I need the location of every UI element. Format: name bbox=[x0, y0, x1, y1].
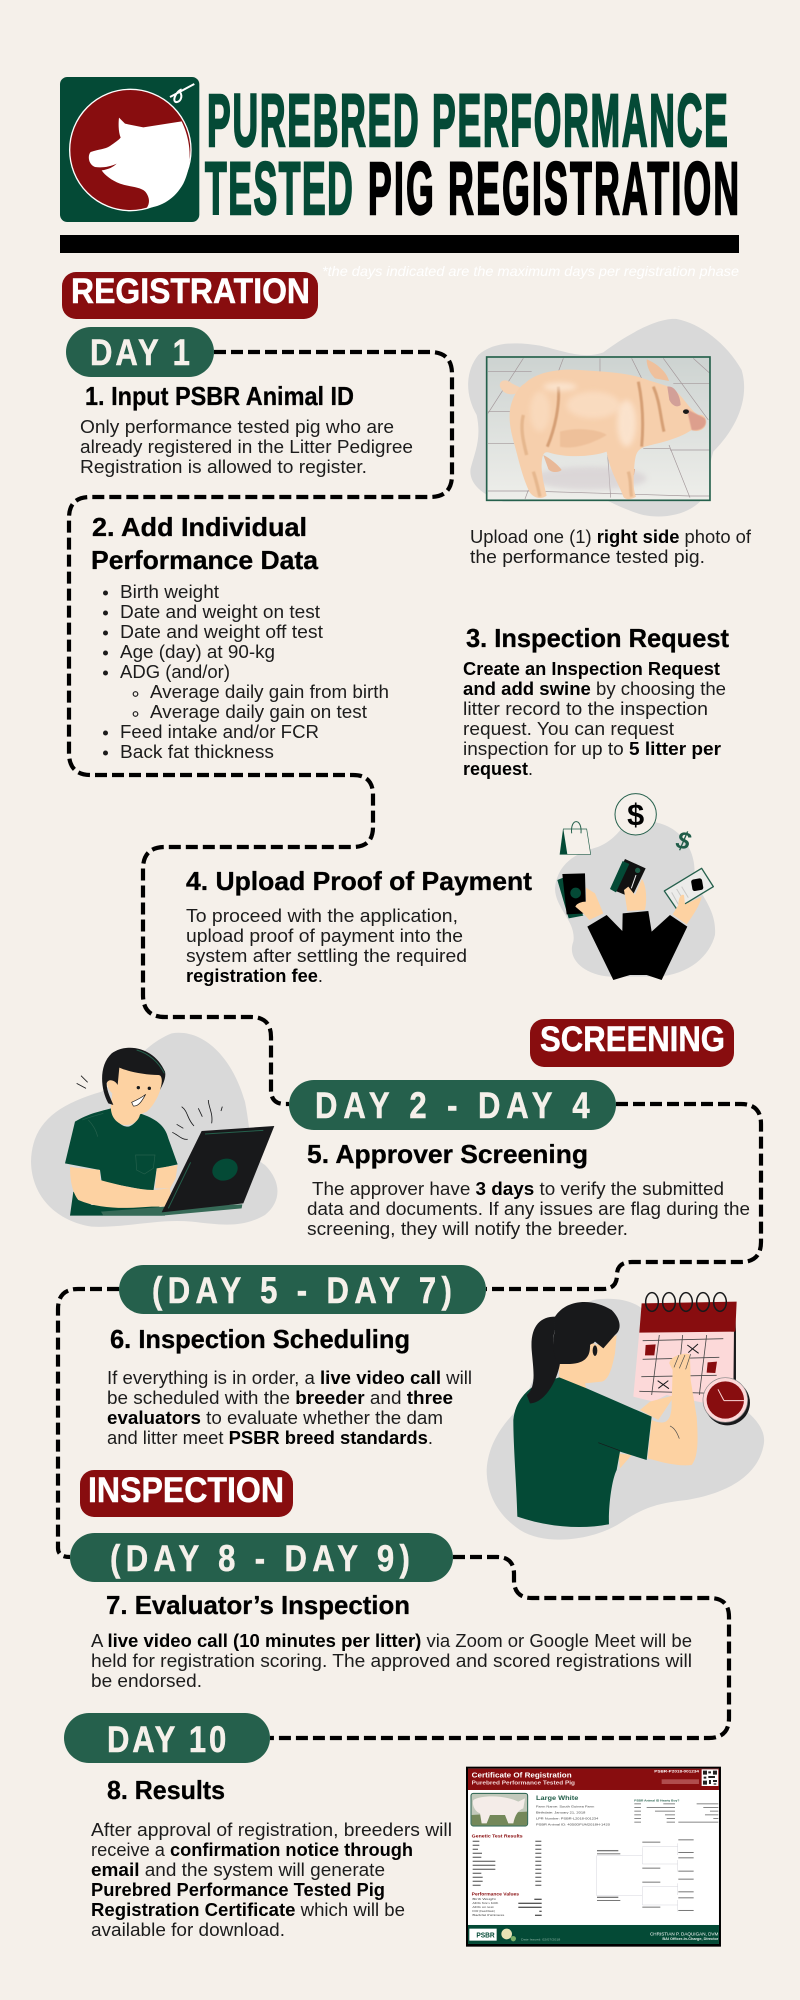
day pill: day 10: DAY 10 bbox=[107, 1720, 226, 1761]
day pill: day 2 to day 4 bbox=[289, 1080, 616, 1130]
step 2: add individual performance data: Average daily gain on test bbox=[150, 702, 367, 722]
step 1: input PSBR animal ID: 1. Input PSBR Animal ID bbox=[85, 381, 354, 411]
certificate of registration preview: Performance Values bbox=[472, 1891, 520, 1896]
step 2: add individual performance data: Date and weight off test bbox=[120, 622, 323, 642]
step 8: results: receive a confirmation notice through bbox=[91, 1840, 413, 1860]
section label: inspection: INSPECTION bbox=[88, 1471, 284, 1510]
illustration: hands with payment methods bbox=[555, 794, 715, 980]
day pill: day 2 to day 4: DAY 2 - DAY 4 bbox=[315, 1086, 590, 1127]
step 6: inspection scheduling bbox=[107, 1324, 472, 1448]
day pill: day 1 bbox=[66, 327, 214, 377]
caption: upload photo: the performance tested pig. bbox=[470, 547, 705, 567]
step 2: add individual performance data: Birth weight bbox=[120, 582, 219, 602]
step 8: results: Purebred Performance Tested Pig bbox=[91, 1880, 385, 1900]
step 4: upload proof of payment: registration fee. bbox=[186, 966, 323, 986]
certificate of registration preview: PSBR Animal ID Hearty Boy? bbox=[634, 1798, 680, 1802]
title: PIG REGISTRATION bbox=[368, 148, 739, 231]
black title rule bbox=[60, 235, 739, 253]
certificate of registration preview: Genetic Test Results bbox=[472, 1833, 523, 1838]
step 5: approver screening: screening, they will notify the breeder. bbox=[307, 1219, 628, 1239]
certificate of registration preview: Farm Name: South Guinea Farm bbox=[536, 1804, 595, 1808]
step 1: input PSBR animal ID bbox=[80, 381, 413, 477]
step 1: input PSBR animal ID: Only performance tested pig who are bbox=[80, 417, 394, 437]
certificate of registration preview: PSBR Animal ID: 4050DFUM2018H-1420 bbox=[536, 1823, 610, 1827]
certificate of registration preview: Birthdate: January 21, 2018 bbox=[536, 1810, 586, 1814]
certificate of registration preview: PSBR-P2018-001234 bbox=[654, 1769, 700, 1773]
step 2: add individual performance data: Date and weight on test bbox=[120, 602, 320, 622]
step 6: inspection scheduling: and litter meet PSBR breed standards. bbox=[107, 1428, 433, 1448]
step 4: upload proof of payment: 4. Upload Proof of Payment bbox=[186, 866, 532, 896]
step 2: add individual performance data: Performance Data bbox=[91, 545, 319, 575]
step 6: inspection scheduling: If everything is in order, a live video call will bbox=[107, 1368, 472, 1388]
day pill: day 5 to day 7 bbox=[119, 1265, 486, 1314]
step 5: approver screening: data and documents. If any issues are flag during the bbox=[307, 1199, 750, 1219]
certificate of registration preview: BAI Officer-In-Charge, Director bbox=[662, 1937, 719, 1941]
step 5: approver screening: The approver have 3 days to verify the submitted bbox=[312, 1179, 724, 1199]
step 2: add individual performance data: Average daily gain from birth bbox=[150, 682, 389, 702]
certificate of registration preview: Certificate Of Registration bbox=[472, 1772, 572, 1779]
step 2: add individual performance data: Feed intake and/or FCR bbox=[120, 722, 319, 742]
step 8: results: Registration Certificate which will be bbox=[91, 1900, 405, 1920]
step 2: add individual performance data: ADG (and/or) bbox=[120, 662, 230, 682]
illustration: woman marking calendar bbox=[487, 1293, 764, 1540]
step 7: evaluator's inspection: 7. Evaluator’s Inspection bbox=[106, 1590, 410, 1620]
step 6: inspection scheduling: evaluators to evaluate whether the dam bbox=[107, 1408, 443, 1428]
step 2: add individual performance data: Back fat thickness bbox=[120, 742, 274, 762]
step 4: upload proof of payment: system after settling the required bbox=[186, 946, 467, 966]
step 8: results: email and the system will generate bbox=[91, 1860, 385, 1880]
certificate of registration preview: Birth Weight bbox=[472, 1897, 496, 1901]
title: PUREBRED PERFORMANCE bbox=[207, 80, 728, 163]
step 8: results bbox=[91, 1775, 452, 1940]
note: maximum days: *the days indicated are the maximum days per registration phase bbox=[322, 263, 739, 279]
step 2: add individual performance data bbox=[91, 512, 389, 762]
day pill: day 5 to day 7: (DAY 5 - DAY 7) bbox=[152, 1271, 452, 1312]
certificate of registration preview: CHRISTIAN P. DAQUIGAN, DVM bbox=[650, 1931, 719, 1936]
step 2: add individual performance data: 2. Add Individual bbox=[92, 512, 307, 542]
certificate of registration preview: PSBR bbox=[476, 1932, 495, 1939]
step 3: inspection request: and add swine by choosing the bbox=[463, 679, 726, 699]
step 1: input PSBR animal ID: already registered in the Litter Pedigree bbox=[80, 437, 413, 457]
step 7: evaluator's inspection: held for registration scoring. The approved and scored registrations will bbox=[91, 1651, 692, 1671]
dashed flow connector: day 1 to day 2 bbox=[69, 352, 452, 1104]
step 4: upload proof of payment: upload proof of payment into the bbox=[186, 926, 463, 946]
step 8: results: available for download. bbox=[91, 1920, 285, 1940]
step 3: inspection request: request. You can request bbox=[463, 719, 674, 739]
step 5: approver screening bbox=[307, 1139, 750, 1239]
certificate of registration preview: ADG from birth bbox=[472, 1901, 499, 1905]
step 7: evaluator's inspection: A live video call (10 minutes per litter) via Zoom or Google Meet will be bbox=[91, 1631, 692, 1651]
certificate of registration preview: Backfat thickness bbox=[472, 1913, 505, 1917]
step 4: upload proof of payment bbox=[186, 866, 532, 986]
dashed flow connector: day 9 to day 10 bbox=[270, 1557, 729, 1738]
photo: right side of pig bbox=[468, 319, 744, 516]
day pill: day 8 to day 9 bbox=[70, 1533, 453, 1582]
caption: upload photo bbox=[470, 527, 752, 567]
section label: screening: SCREENING bbox=[540, 1020, 725, 1059]
certificate of registration preview: ADG on test bbox=[472, 1905, 494, 1909]
certificate of registration preview bbox=[466, 1767, 721, 1947]
dashed flow connector: day 5 to day 8 bbox=[58, 1289, 119, 1557]
caption: upload photo: Upload one (1) right side photo of bbox=[470, 527, 752, 547]
step 6: inspection scheduling: 6. Inspection Scheduling bbox=[110, 1324, 410, 1354]
certificate of registration preview: LPR Number: PSBR-L2018-001234 bbox=[536, 1817, 599, 1821]
logo: PSBR pig bbox=[60, 77, 199, 222]
step 1: input PSBR animal ID: Registration is allowed to register. bbox=[80, 457, 367, 477]
step 3: inspection request bbox=[463, 623, 729, 779]
step 5: approver screening: 5. Approver Screening bbox=[307, 1139, 588, 1169]
section label: registration: REGISTRATION bbox=[71, 272, 310, 311]
certificate of registration preview: Large White bbox=[536, 1795, 579, 1802]
illustration: man at laptop bbox=[31, 1033, 277, 1227]
certificate of registration preview: Date Issued: 02/07/2018 bbox=[521, 1938, 561, 1942]
step 3: inspection request: request. bbox=[463, 759, 533, 779]
step 3: inspection request: 3. Inspection Request bbox=[466, 623, 729, 653]
step 6: inspection scheduling: be scheduled with the breeder and three bbox=[107, 1388, 453, 1408]
certificate of registration preview: FCR (Feed/Gain) bbox=[472, 1909, 495, 1913]
day pill: day 8 to day 9: (DAY 8 - DAY 9) bbox=[110, 1539, 410, 1580]
title bbox=[205, 80, 739, 231]
step 2: add individual performance data: Age (day) at 90-kg bbox=[120, 642, 275, 662]
certificate of registration preview: Purebred Performance Tested Pig bbox=[472, 1781, 576, 1787]
illustration: hands with payment methods: $ bbox=[627, 798, 644, 832]
step 8: results: After approval of registration, breeders will bbox=[91, 1820, 452, 1840]
day pill: day 10 bbox=[64, 1713, 270, 1763]
dashed flow connector: day 4 to day 5 bbox=[486, 1104, 761, 1289]
step 3: inspection request: Create an Inspection Request bbox=[463, 659, 720, 679]
step 7: evaluator's inspection bbox=[91, 1590, 692, 1691]
illustration: hands with payment methods: $ bbox=[673, 827, 693, 856]
step 8: results: 8. Results bbox=[107, 1775, 225, 1805]
step 4: upload proof of payment: To proceed with the application, bbox=[186, 906, 458, 926]
title: TESTED bbox=[205, 148, 353, 231]
step 3: inspection request: inspection for up to 5 litter per bbox=[463, 739, 721, 759]
day pill: day 1: DAY 1 bbox=[90, 333, 190, 374]
step 3: inspection request: litter record to the inspection bbox=[463, 699, 708, 719]
step 7: evaluator's inspection: be endorsed. bbox=[91, 1671, 202, 1691]
